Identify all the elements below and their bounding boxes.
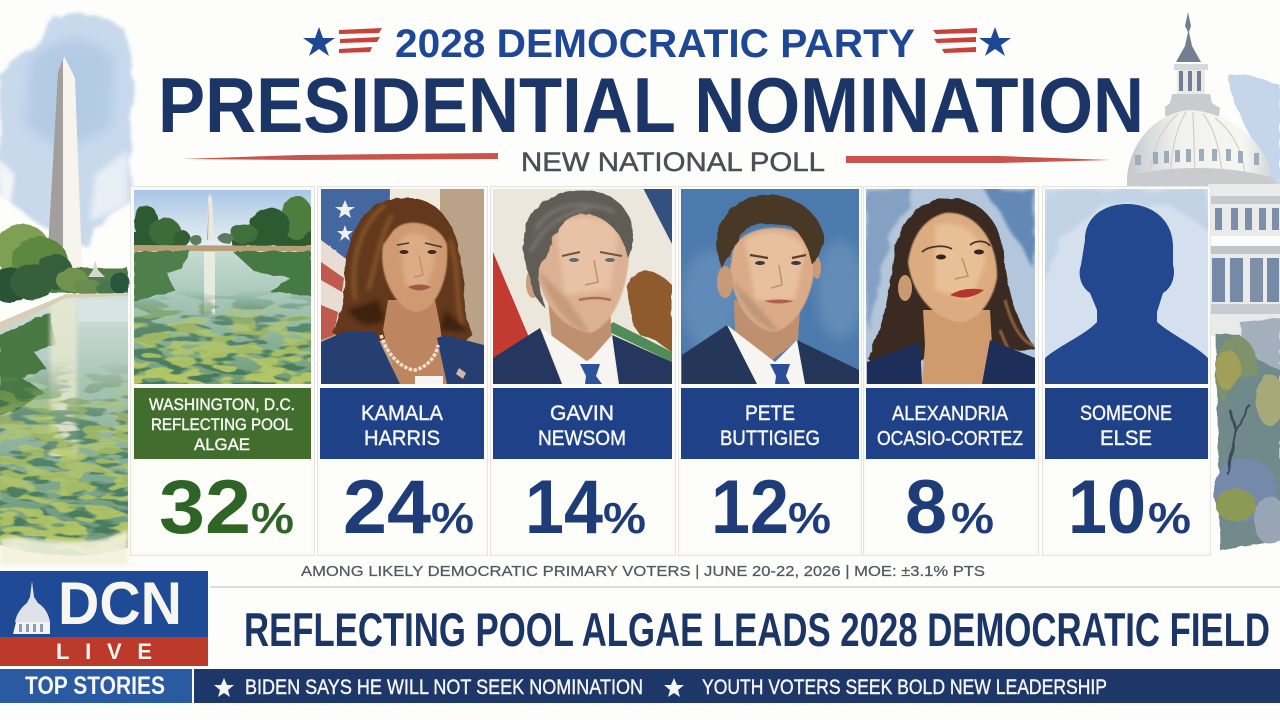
news ticker bbox=[194, 669, 1280, 703]
label band: Alexandria Ocasio-Cortez bbox=[866, 388, 1035, 459]
panel: Someone Else bbox=[1042, 186, 1210, 556]
label: Top Stories: TOP STORIES bbox=[25, 672, 165, 700]
value: 12% bbox=[681, 460, 859, 552]
label band: Someone Else: ELSE bbox=[1100, 427, 1152, 450]
value: 12%: 12 bbox=[711, 465, 789, 550]
panel: Gavin Newsom bbox=[490, 186, 676, 556]
head bbox=[730, 228, 815, 332]
label band: Pete Buttigieg: PETE bbox=[745, 402, 795, 425]
trees beside the capitol bbox=[1213, 318, 1280, 550]
value: 32%: 32 bbox=[159, 465, 251, 550]
value: 32%: % bbox=[251, 494, 294, 543]
news ticker: BIDEN SAYS HE WILL NOT SEEK NOMINATION bbox=[245, 676, 643, 699]
value: 8% bbox=[866, 460, 1035, 552]
hair bbox=[332, 198, 473, 342]
icon: capitol dome bbox=[13, 581, 50, 634]
suit bbox=[493, 328, 672, 384]
value: 10% bbox=[1045, 460, 1208, 552]
suit bbox=[682, 325, 859, 384]
value: 14%: 14 bbox=[525, 465, 603, 550]
label band: Washington, D.C. Reflecting Pool Algae: REFLECTING POOL bbox=[151, 415, 293, 434]
label band: Pete Buttigieg: BUTTIGIEG bbox=[720, 427, 820, 450]
neck and chest bbox=[383, 300, 447, 384]
hair bbox=[867, 198, 1035, 365]
icon: star bbox=[664, 678, 684, 697]
label band: Gavin Newsom: GAVIN bbox=[550, 402, 614, 425]
face bbox=[382, 223, 447, 312]
label band: Alexandria Ocasio-Cortez: ALEXANDRIA bbox=[892, 403, 1009, 425]
value: 14% bbox=[493, 460, 672, 552]
panel: Pete Buttigieg bbox=[678, 186, 864, 556]
value: 12%: % bbox=[788, 494, 831, 543]
panel: reflecting pool algae bbox=[130, 186, 314, 556]
reflecting pool water bbox=[0, 294, 128, 565]
label band: Washington, D.C. Reflecting Pool Algae: ALGAE bbox=[194, 435, 250, 454]
photo: Gavin Newsom portrait bbox=[493, 188, 672, 384]
icon: california bear on flag bbox=[627, 271, 672, 352]
label band: Washington, D.C. Reflecting Pool Algae: WASHINGTON, D.C. bbox=[149, 395, 295, 414]
shirt and tie bbox=[541, 328, 618, 384]
photo: Kamala Harris portrait bbox=[321, 189, 484, 384]
face bbox=[908, 213, 997, 322]
icon: left star and stripes bbox=[303, 27, 382, 56]
headline bar bbox=[210, 587, 1280, 667]
ear bbox=[526, 272, 540, 298]
shirt and tie bbox=[727, 325, 805, 384]
label band: Gavin Newsom: NEWSOM bbox=[538, 427, 626, 450]
necklace bbox=[381, 335, 438, 370]
label band: Alexandria Ocasio-Cortez: OCASIO-CORTEZ bbox=[877, 428, 1023, 450]
ear bbox=[898, 275, 912, 301]
value: 14%: % bbox=[603, 494, 646, 543]
heading: 2028 Democratic Party: 2028 DEMOCRATIC PARTY bbox=[395, 22, 915, 66]
hair bbox=[717, 195, 824, 268]
logo: DCN Live bbox=[0, 570, 208, 666]
value: 24% bbox=[320, 460, 484, 552]
value: 32% bbox=[134, 460, 311, 552]
heading: Presidential Nomination: PRESIDENTIAL NOMINATION bbox=[158, 61, 1144, 149]
capitol wall with windows bbox=[1208, 184, 1280, 336]
icon: star bbox=[214, 678, 234, 697]
label band: Kamala Harris: KAMALA bbox=[361, 402, 443, 425]
value: 8%: % bbox=[951, 494, 994, 543]
label band: Gavin Newsom bbox=[493, 388, 672, 459]
illustration: washington monument and reflecting pool at left bbox=[0, 14, 135, 565]
photo: anonymous silhouette bbox=[1045, 189, 1208, 384]
label band: Kamala Harris: HARRIS bbox=[364, 427, 440, 450]
neck bbox=[548, 300, 612, 362]
subtitle with red rules: NEW NATIONAL POLL bbox=[521, 147, 825, 177]
value: 24%: % bbox=[431, 494, 474, 543]
value: 10%: 10 bbox=[1068, 465, 1146, 550]
panel: Kamala Harris bbox=[318, 186, 488, 556]
trees left of the pool bbox=[0, 224, 130, 303]
value: 8%: 8 bbox=[905, 465, 947, 550]
label band: Someone Else bbox=[1045, 388, 1208, 459]
ears bbox=[717, 266, 733, 298]
photo: Alexandria Ocasio-Cortez portrait bbox=[866, 189, 1035, 384]
icon: monument obelisk bbox=[48, 56, 82, 270]
news ticker: YOUTH VOTERS SEEK BOLD NEW LEADERSHIP bbox=[702, 676, 1107, 699]
label band: Kamala Harris bbox=[320, 388, 484, 459]
subtitle with red rules bbox=[182, 147, 1110, 177]
logo: DCN Live: DCN bbox=[58, 570, 182, 637]
label band: Pete Buttigieg bbox=[681, 388, 859, 459]
jacket bbox=[867, 340, 1035, 384]
neck bbox=[734, 300, 800, 362]
photo: Pete Buttigieg portrait bbox=[680, 189, 864, 384]
label band: Someone Else: SOMEONE bbox=[1080, 402, 1172, 425]
poll methodology note: AMONG LIKELY DEMOCRATIC PRIMARY VOTERS | JUNE 20-22, 2026 | MOE: ±3.1% PTS bbox=[301, 563, 985, 580]
hair bbox=[523, 191, 633, 308]
logo: DCN Live: LIVE bbox=[56, 639, 152, 664]
illustration: capitol building at right bbox=[1127, 12, 1280, 550]
label band: Washington, D.C. Reflecting Pool Algae bbox=[134, 388, 311, 459]
icon: dome and cupola bbox=[1127, 12, 1276, 186]
panel: Alexandria Ocasio-Cortez bbox=[864, 186, 1038, 556]
value: 24%: 24 bbox=[343, 465, 431, 550]
icon: right star and stripes bbox=[933, 27, 1011, 56]
head bbox=[537, 211, 629, 333]
title block bbox=[158, 22, 1144, 177]
neck and chest bbox=[922, 310, 992, 384]
value: 10%: % bbox=[1148, 494, 1191, 543]
jacket bbox=[321, 332, 484, 384]
photo: reflecting pool bbox=[134, 190, 313, 384]
